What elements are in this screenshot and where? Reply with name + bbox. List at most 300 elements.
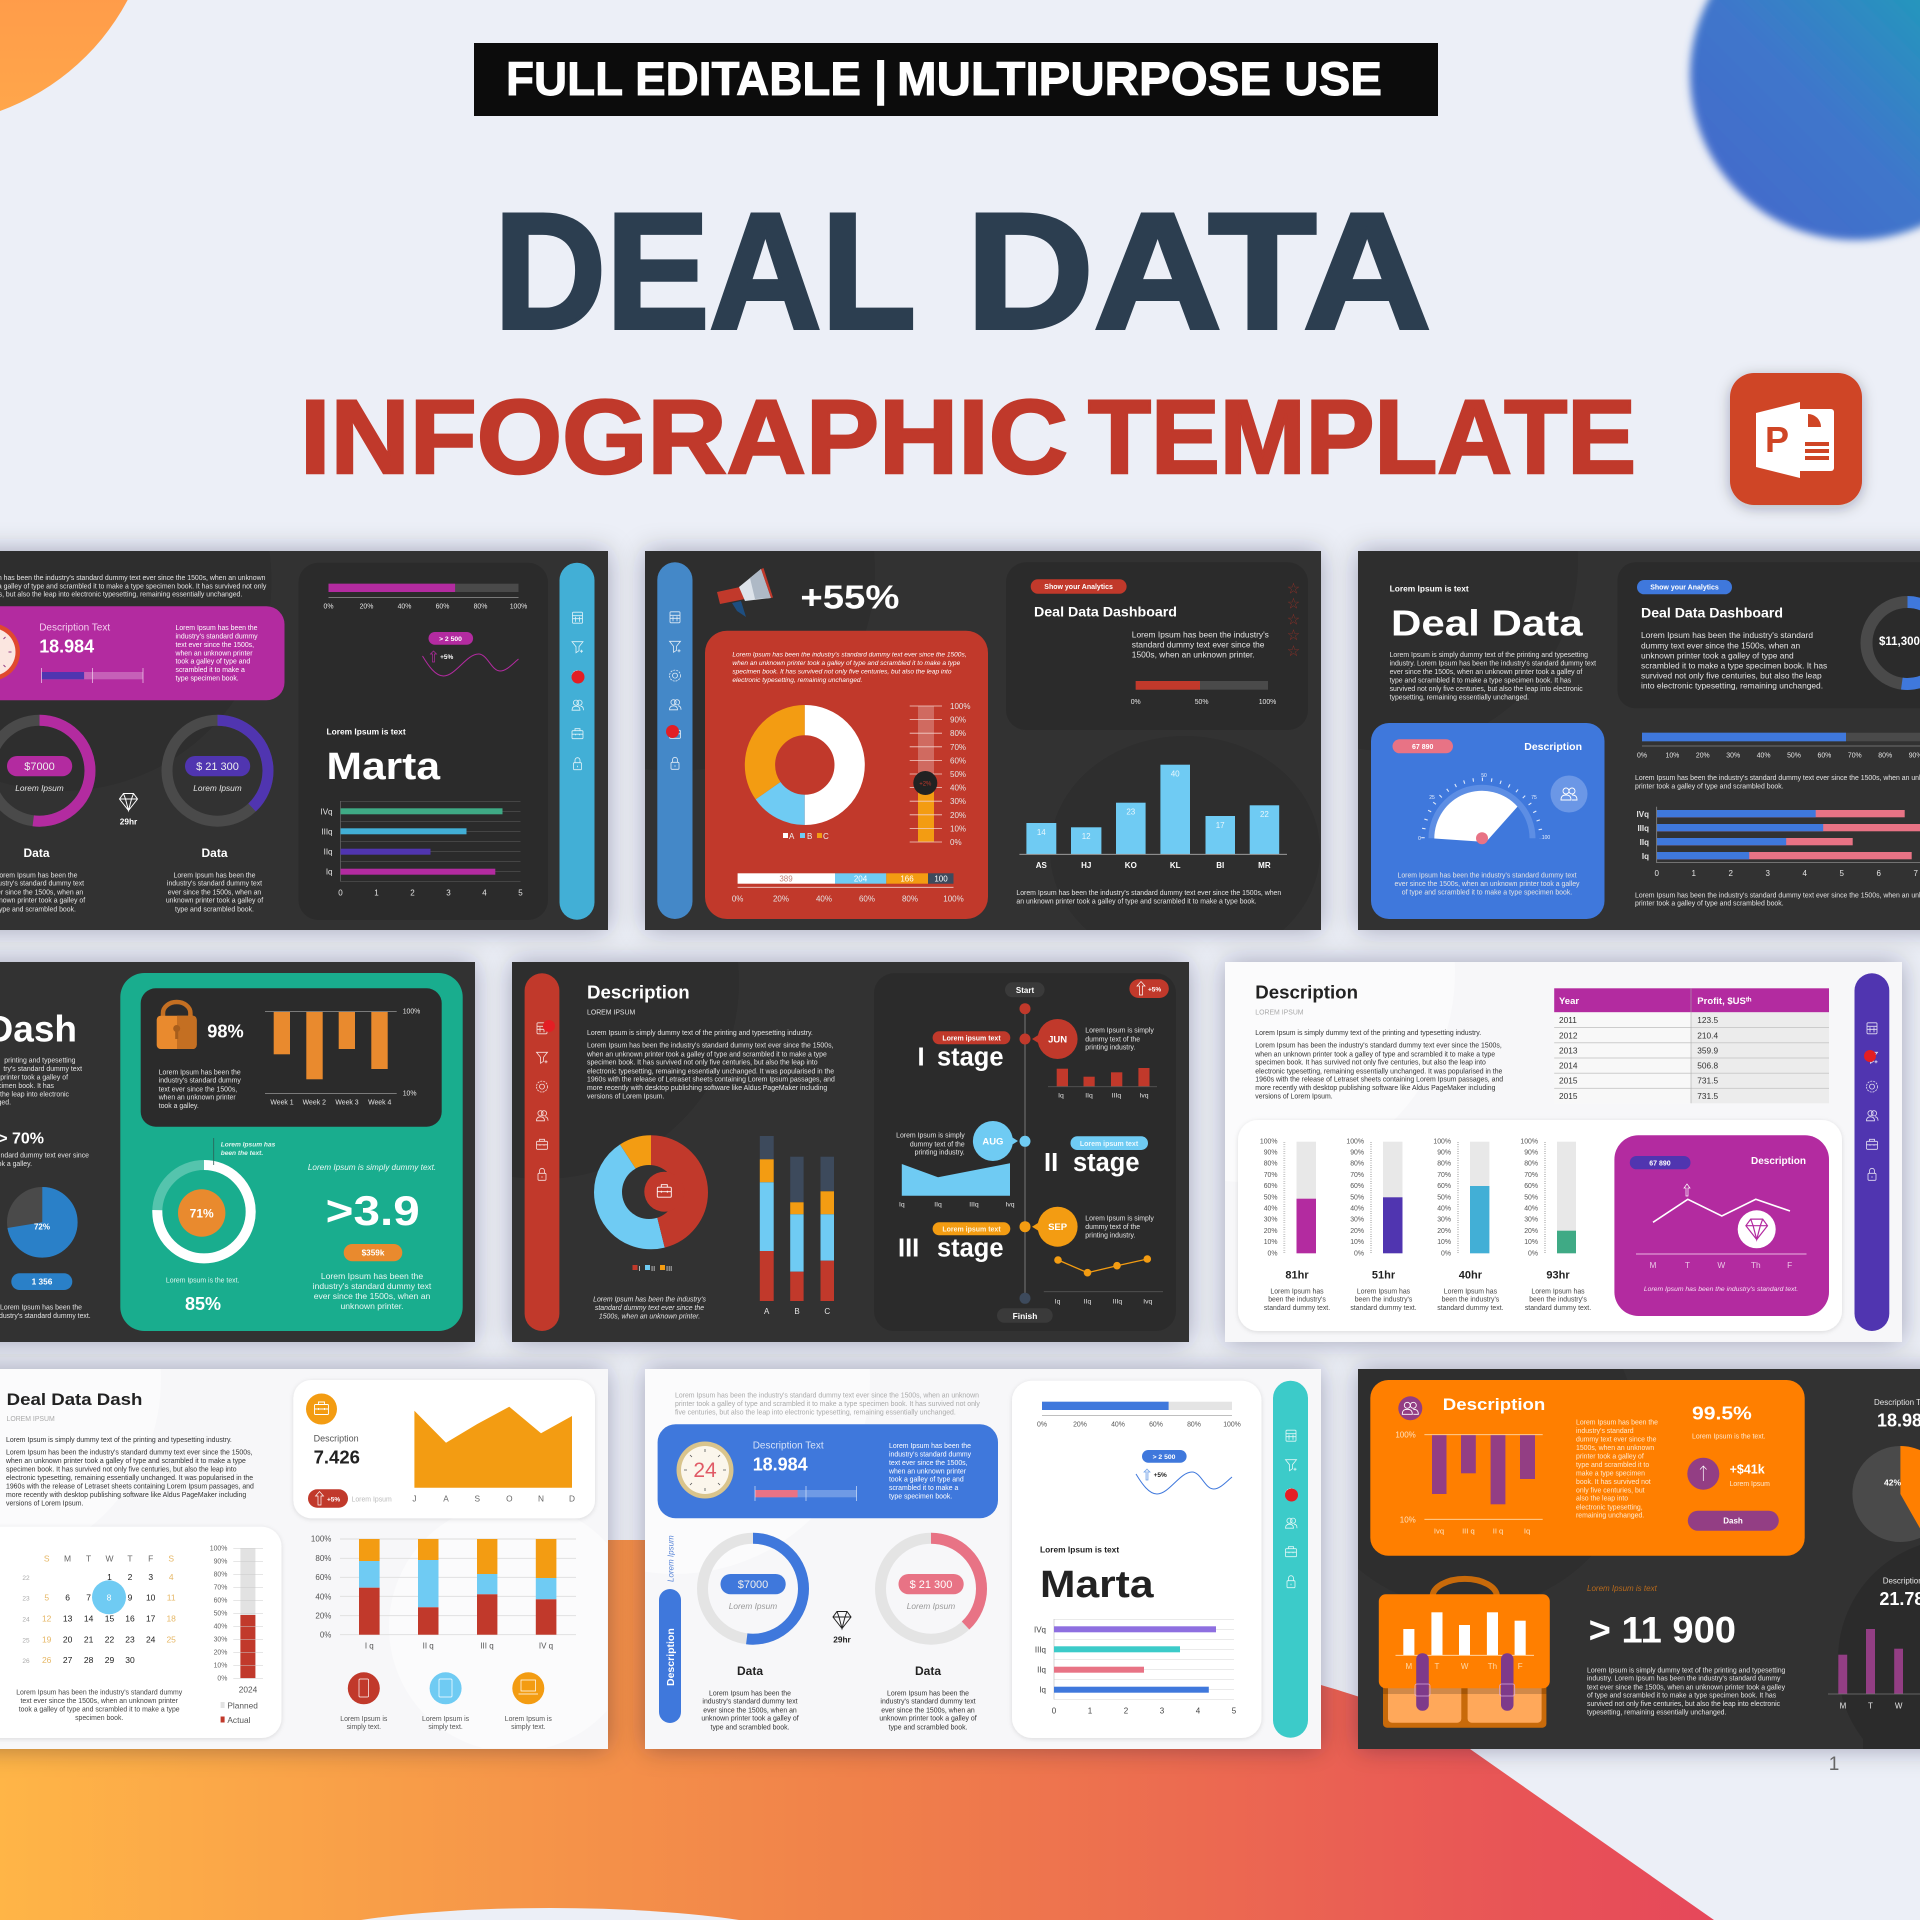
icon: briefcase (306, 1394, 337, 1424)
bar chart: 22 (1260, 810, 1269, 819)
horizontal bar chart: IVq (1034, 1625, 1046, 1634)
vertical gauges: standard dummy text. (1437, 1305, 1504, 1312)
card: dark inner (141, 988, 442, 1127)
dots (1020, 1003, 1030, 1304)
stat (0, 1130, 89, 1168)
vertical gauges: 100% (1433, 1138, 1451, 1145)
heading block: industry. Lorem Ipsum has been the industry's standard dummy text (1390, 661, 1596, 668)
panel background (1358, 1369, 1920, 1749)
stage III: Ivq (1143, 1298, 1153, 1305)
progress scale: 60% (1818, 753, 1831, 760)
icon row: Lorem Ipsum is (340, 1716, 388, 1723)
value: 7.426 (314, 1447, 360, 1467)
stat 85%: Lorem Ipsum is the text. (166, 1278, 240, 1285)
vertical gauges: 20% (1350, 1228, 1364, 1235)
calendar: 9 (128, 1593, 133, 1603)
calendar: 11 (167, 1593, 176, 1603)
progress scale: 40% (1757, 753, 1770, 760)
vertical gauges: 30% (1264, 1217, 1278, 1224)
active marker (666, 725, 679, 738)
badge: +5% (1148, 986, 1161, 994)
icon row: Lorem Ipsum is (505, 1716, 552, 1723)
stage II: Lorem Ipsum is simply (896, 1133, 965, 1140)
bar chart: 40 (1171, 770, 1180, 778)
banner: FULL EDITABLE (506, 53, 861, 106)
calendar: 14 (84, 1614, 94, 1624)
area: J (412, 1493, 416, 1503)
data text 2: Lorem Ipsum has been the (174, 872, 256, 879)
stage III: IIq (1084, 1298, 1091, 1305)
text block: type specimen book. (889, 1493, 952, 1500)
heading block: Deal Data (1391, 603, 1584, 644)
table: 506.8 (1697, 1060, 1718, 1070)
pill (1637, 580, 1732, 594)
stage I: I (918, 1044, 925, 1072)
stage II: Iq (899, 1202, 905, 1209)
thermometer: 0% (950, 838, 962, 847)
calendar: 29 (105, 1655, 114, 1665)
panel background (645, 1369, 1321, 1749)
paragraph: electronic typesetting, remaining essentially unchanged. It was popularised in the (1255, 1068, 1503, 1075)
start pill: Start (1016, 986, 1034, 995)
decoration: orange corner blob (0, 0, 155, 125)
donut 1: $7000 (738, 1579, 768, 1591)
card: orange (1370, 1380, 1805, 1556)
area (412, 1407, 575, 1503)
calendar: W (105, 1553, 114, 1563)
bar chart: Week 2 (303, 1100, 326, 1107)
calendar: S (44, 1553, 50, 1563)
donut: Lorem Ipsum has (221, 1142, 276, 1149)
data text 1 (701, 1664, 799, 1731)
progress scale: 60% (1149, 1422, 1163, 1429)
big stat: Lorem Ipsum is text (1587, 1584, 1658, 1593)
heading: LOREM IPSUM (1255, 1009, 1304, 1016)
gauge: 40% (214, 1623, 227, 1630)
stacked chart: II q (423, 1642, 434, 1651)
icon: briefcase (657, 1185, 671, 1197)
name: Lorem Ipsum is text (326, 727, 406, 737)
stage I (918, 1019, 1157, 1100)
stacked columns (760, 1136, 834, 1316)
card: gauge (1371, 723, 1604, 919)
card: magenta: 67 890 (1649, 1160, 1671, 1167)
stage I: IIq (1085, 1093, 1093, 1100)
heading (1255, 982, 1358, 1016)
gauge: 0% (217, 1675, 227, 1682)
card: magenta: Th (1751, 1260, 1761, 1270)
panel 4: green dashboard (0, 962, 475, 1342)
bar chart: HJ (1081, 861, 1091, 870)
vertical gauges: Lorem Ipsum has (1531, 1288, 1585, 1295)
gauge: 100% (210, 1545, 227, 1552)
stage I: JUN (1048, 1034, 1067, 1046)
vertical gauges: Lorem Ipsum has (1270, 1288, 1324, 1295)
calendar: 25 (22, 1638, 30, 1645)
sidebar (1273, 1381, 1308, 1738)
icon row: simply text. (347, 1724, 381, 1731)
heading: LOREM IPSUM (587, 1009, 636, 1016)
calendar: 26 (42, 1655, 52, 1665)
stacked bar: 166 (900, 874, 914, 884)
stacked bar: 100% (943, 895, 964, 904)
pie stat (1852, 1398, 1920, 1542)
stacked bar: 0% (732, 895, 743, 904)
active marker (572, 670, 584, 684)
stat with arrow (1687, 1458, 1770, 1490)
donut 1 (702, 1538, 804, 1639)
paragraph: dummy text ever since the 1500s, when an (1641, 640, 1801, 650)
data text 2: Data (201, 846, 228, 860)
icon row: Lorem Ipsum is (422, 1716, 470, 1723)
stacked horizontal bars: 0 (1654, 869, 1659, 878)
paragraph: versions of Lorem Ipsum. (6, 1500, 83, 1507)
name (326, 727, 441, 788)
icon: users (1398, 1396, 1422, 1420)
vertical gauges: 70% (1524, 1172, 1538, 1179)
gauge: 100 (1542, 835, 1550, 841)
panel background (0, 962, 475, 1342)
thermometer: 30% (950, 797, 966, 806)
illustration: briefcase chart: T (1434, 1662, 1439, 1671)
calendar: T (86, 1553, 91, 1563)
paragraph: unknown printer took a galley of type and (1641, 650, 1794, 660)
bar chart: BI (1216, 861, 1224, 870)
stage III (898, 1207, 1163, 1305)
vertical gauges: 90% (1350, 1150, 1364, 1156)
thermometer: 20% (950, 811, 966, 820)
stage I: Iq (1058, 1093, 1064, 1100)
active marker (543, 1020, 555, 1032)
text block: Lorem Ipsum has been the (176, 625, 258, 632)
panel 2: red analytics dashboard (629, 535, 1337, 946)
italic text: electronic typesetting, remaining unchanged. (732, 677, 863, 684)
area: A (443, 1493, 449, 1503)
stage I: Lorem Ipsum is simply (1085, 1028, 1154, 1035)
vertical gauges: standard dummy text. (1350, 1305, 1417, 1312)
area: S (475, 1493, 481, 1503)
icon: users (1550, 776, 1588, 812)
table: 210.4 (1697, 1030, 1718, 1040)
vertical gauges: 60% (1437, 1183, 1451, 1190)
caption: Lorem Ipsum has been the industry's standard dummy (16, 1690, 183, 1697)
stage I: Ivq (1139, 1093, 1149, 1100)
data text 2 (879, 1664, 977, 1731)
intro text: printer took a galley of type and scrambled it to make a type specimen book. It has survived not only (675, 1401, 980, 1408)
icon: PowerPoint: P (1765, 419, 1789, 460)
icon: diamond (120, 794, 138, 827)
paragraph: versions of Lorem Ipsum. (587, 1093, 664, 1100)
banner: | (874, 53, 887, 106)
italic caption: 1500s, when an unknown printer. (599, 1313, 700, 1320)
thermometer: 50% (950, 770, 966, 779)
pie stat: 42% (1884, 1477, 1901, 1487)
gauge: 50 (1481, 773, 1487, 779)
vertical gauges: standard dummy text. (1525, 1305, 1591, 1312)
illustration: briefcase chart: F (1518, 1662, 1523, 1671)
text: Lorem Ipsum has been the (0, 1305, 82, 1312)
vertical gauges: 100% (1260, 1138, 1278, 1145)
thermometer: 70% (950, 743, 966, 752)
stacked chart: 40% (315, 1592, 331, 1601)
bar chart: 10% (403, 1091, 416, 1098)
data text 1: Data (737, 1664, 763, 1678)
text block: type specimen book. (176, 675, 239, 682)
bar chart: III q (1462, 1526, 1475, 1535)
card: magenta: T (1685, 1260, 1690, 1270)
heading: Description (1443, 1395, 1545, 1414)
vertical gauges: 30% (1437, 1217, 1451, 1224)
bar chart: Week 3 (335, 1100, 359, 1107)
horizontal bar chart: 1 (1088, 1706, 1093, 1715)
stars: ☆ (1287, 627, 1300, 644)
thermometer: 80% (950, 729, 966, 738)
horizontal bar chart: 0 (1052, 1706, 1057, 1715)
donut 1: Lorem Ipsum (729, 1601, 777, 1611)
sidebar icons (670, 612, 681, 769)
paragraph: electronic typesetting, (1576, 1504, 1643, 1511)
panel background (1225, 962, 1902, 1342)
text block: when an unknown printer (174, 650, 253, 657)
data text 1: unknown printer took a galley of (701, 1716, 799, 1723)
gauge: 60% (214, 1597, 227, 1604)
panel background (1358, 551, 1920, 930)
caption: took a galley of type and scrambled it to make a type (19, 1707, 180, 1714)
vertical gauges: 70% (1437, 1172, 1451, 1179)
legend: C (823, 832, 829, 841)
table: Year (1559, 996, 1579, 1007)
stage III: printing industry. (1085, 1232, 1135, 1239)
stacked horizontal bars: IVq (1637, 810, 1649, 819)
donut 2 (880, 1538, 982, 1639)
text: when an unknown printer (158, 1095, 236, 1102)
vertical gauges: 60% (1264, 1183, 1278, 1190)
paragraph: standard dummy text ever since the (1132, 640, 1265, 650)
thermometer: 40% (950, 784, 966, 793)
illustration: briefcase chart: W (1461, 1662, 1469, 1671)
wave sparkline (422, 632, 518, 676)
paragraph: into electronic typesetting, remaining unchanged. (1641, 681, 1823, 691)
calendar: 22 (22, 1575, 30, 1582)
progress (42, 668, 143, 683)
progress scale: 20% (1696, 753, 1710, 760)
icon: clock (676, 1442, 734, 1498)
text: description value: Description Text (39, 623, 110, 634)
stacked bar (732, 873, 964, 904)
vertical gauges: 40% (1264, 1206, 1278, 1212)
today marker (92, 1580, 126, 1614)
vertical gauges: 80% (1524, 1161, 1538, 1168)
progress (755, 1486, 856, 1501)
card: green (120, 973, 463, 1331)
vertical gauges: 60% (1524, 1183, 1538, 1190)
paragraph: Lorem Ipsum is simply dummy text of the printing and typesetting industry. (6, 1437, 232, 1444)
text: dustry's standard dummy text. (0, 1313, 91, 1320)
stars: ☆ (1287, 612, 1300, 628)
pie chart: 72% (34, 1223, 50, 1232)
panel background (645, 551, 1321, 930)
data text 2: industry's standard dummy text (167, 881, 262, 888)
vertical gauges: been the industry's (1529, 1297, 1587, 1304)
data text 1 (0, 846, 85, 913)
horizontal bar chart (320, 801, 523, 897)
progress scale: 100% (1223, 1422, 1241, 1429)
stacked bar: 60% (859, 895, 875, 904)
bar chart: 17 (1216, 821, 1225, 830)
legend: III (666, 1264, 672, 1273)
stage III: SEP (1048, 1222, 1068, 1233)
icon: diamond: 29hr (833, 1635, 852, 1645)
calendar: 27 (63, 1655, 73, 1665)
card: magenta (1614, 1135, 1829, 1316)
vertical gauges: 90% (1264, 1150, 1278, 1156)
table: 2012 (1559, 1030, 1578, 1040)
big stat: of type and scrambled it to make a type specimen book. It has (1587, 1693, 1777, 1700)
donut: been the text. (221, 1150, 263, 1157)
bar chart: 14 (1037, 828, 1046, 837)
progress: 100% (1259, 699, 1276, 706)
data text 2: Lorem Ipsum has been the (887, 1690, 969, 1697)
table: 123.5 (1697, 1015, 1718, 1025)
paragraph: Lorem Ipsum has been the industry's standard dummy text ever since the 1500s, (587, 1043, 834, 1050)
sidebar (560, 563, 594, 920)
paragraph: 1500s, when an unknown (1576, 1445, 1654, 1452)
data text 2: unknown printer took a galley of (879, 1716, 977, 1723)
decoration: bottom gradient wave (0, 1540, 1714, 1920)
stage II: Ivq (1005, 1202, 1015, 1209)
stacked columns: A (764, 1307, 770, 1316)
text: description value: 18.984 (39, 636, 95, 657)
paragraph: scrambled it to make a type specimen book. It has (1641, 660, 1827, 670)
vertical gauges: 0% (1268, 1250, 1278, 1257)
bars stat (1828, 1539, 1920, 1749)
stacked bar: 40% (816, 895, 832, 904)
pill (1392, 739, 1453, 753)
gauge: 2024 (239, 1685, 258, 1695)
stacked chart: IV q (539, 1642, 553, 1651)
card: magenta: W (1717, 1260, 1725, 1270)
vertical gauges: been the industry's (1442, 1297, 1500, 1304)
horizontal bar chart: 0 (338, 888, 343, 897)
text block: when an unknown printer (888, 1468, 967, 1475)
calendar: S (168, 1553, 174, 1563)
italic text: when an unknown printer took a galley of type and scrambled it to make a type (732, 660, 961, 667)
vertical gauges: 90% (1524, 1150, 1538, 1156)
text block: scrambled it to make a (176, 667, 245, 674)
calendar: 8 (107, 1593, 112, 1603)
table: 359.9 (1697, 1046, 1718, 1056)
vertical gauges: standard dummy text. (1264, 1305, 1330, 1312)
horizontal bar chart: 3 (1160, 1706, 1165, 1715)
donut 2: $ 21 300 (910, 1579, 952, 1591)
vertical label (659, 1535, 681, 1723)
legend (632, 1264, 672, 1273)
pill: Show your Analytics (1650, 585, 1719, 592)
calendar: 10 (146, 1593, 156, 1603)
vertical gauges: been the industry's (1268, 1297, 1326, 1304)
stacked horizontal bars: 2 (1728, 869, 1733, 878)
calendar: 1 (107, 1572, 112, 1582)
heading block: type and scrambled it to make a type specimen book. It has (1390, 678, 1572, 685)
vertical gauges: 40% (1350, 1206, 1364, 1212)
calendar: 20 (63, 1635, 73, 1645)
stacked chart: 80% (315, 1554, 331, 1563)
table: 2015 (1559, 1091, 1578, 1101)
calendar: M (64, 1553, 71, 1563)
timeline axis (1024, 1008, 1026, 1300)
card: magenta: F (1787, 1260, 1792, 1270)
progress (1131, 681, 1276, 706)
finish pill (997, 1308, 1053, 1323)
text block: text ever since the 1500s, (889, 1460, 968, 1467)
vertical gauges: 70% (1264, 1172, 1278, 1179)
data text 2: type and scrambled book. (889, 1724, 968, 1731)
paragraph: versions of Lorem Ipsum. (1255, 1093, 1333, 1100)
stacked chart (311, 1535, 576, 1651)
stat (1692, 1403, 1766, 1440)
text: of type and scrambled it to make a type specimen book. (1402, 889, 1572, 896)
paragraph: more recently with desktop publishing software like Aldus PageMaker including (587, 1085, 827, 1092)
text: description value: 18.984 (753, 1454, 808, 1475)
calendar: 15 (105, 1614, 114, 1624)
vertical gauges: 0% (1528, 1250, 1538, 1257)
paragraph: specimen book. It has survived not only five centuries, but also the leap into (6, 1467, 237, 1474)
paragraph: dummy text ever since the (1576, 1437, 1657, 1444)
horizontal bar chart: 2 (1124, 1706, 1129, 1715)
big stat: Lorem Ipsum is simply dummy text of the printing and typesetting (1587, 1667, 1786, 1674)
gauge: 75 (1531, 795, 1537, 801)
stars: ☆ (1287, 643, 1300, 660)
progress scale: 80% (474, 604, 487, 611)
card: gauges (1238, 1120, 1842, 1331)
calendar: 16 (125, 1614, 135, 1624)
calendar: 5 (44, 1593, 49, 1603)
stars: ☆ (1287, 580, 1300, 598)
stage I: IIIq (1112, 1093, 1121, 1100)
progress scale: 60% (436, 604, 449, 611)
paragraph: when an unknown printer took a galley of type and scrambled it to make a type (5, 1458, 246, 1465)
text block: text ever since the 1500s, (176, 642, 254, 649)
horizontal bar chart: IIIq (321, 827, 332, 836)
page number: 1 (1829, 1754, 1839, 1775)
thermometer (910, 702, 970, 847)
text block: took a galley of type and (176, 659, 250, 666)
sidebar (657, 562, 692, 919)
paragraph: printer took a galley of (0, 1075, 68, 1082)
progress scale: 0% (1637, 753, 1647, 760)
bar chart (1395, 1430, 1543, 1535)
stage III: stage (937, 1235, 1004, 1263)
calendar: 24 (22, 1617, 30, 1624)
stacked bar: 100 (934, 874, 948, 884)
start pill (1005, 982, 1045, 997)
pill: 1 356 (32, 1277, 53, 1287)
heading: Deal Data Dashboard (1641, 605, 1783, 620)
stage II: Lorem ipsum text (1080, 1141, 1139, 1148)
big stat: > 11 900 (1589, 1610, 1736, 1651)
stage II: printing industry. (915, 1150, 965, 1157)
stat: 98% (207, 1022, 244, 1042)
bar chart: 100% (403, 1008, 420, 1015)
icon row (340, 1672, 552, 1731)
bar chart: MR (1258, 861, 1271, 870)
legend: I (638, 1264, 641, 1273)
sidebar (1854, 973, 1889, 1331)
calendar: 25 (166, 1635, 176, 1645)
paragraph: 1960s with the release of Letraset sheets containing Lorem Ipsum passages, and (1255, 1077, 1503, 1084)
calendar: 6 (65, 1593, 70, 1603)
stat >3.9: Lorem Ipsum has been the (321, 1271, 423, 1281)
